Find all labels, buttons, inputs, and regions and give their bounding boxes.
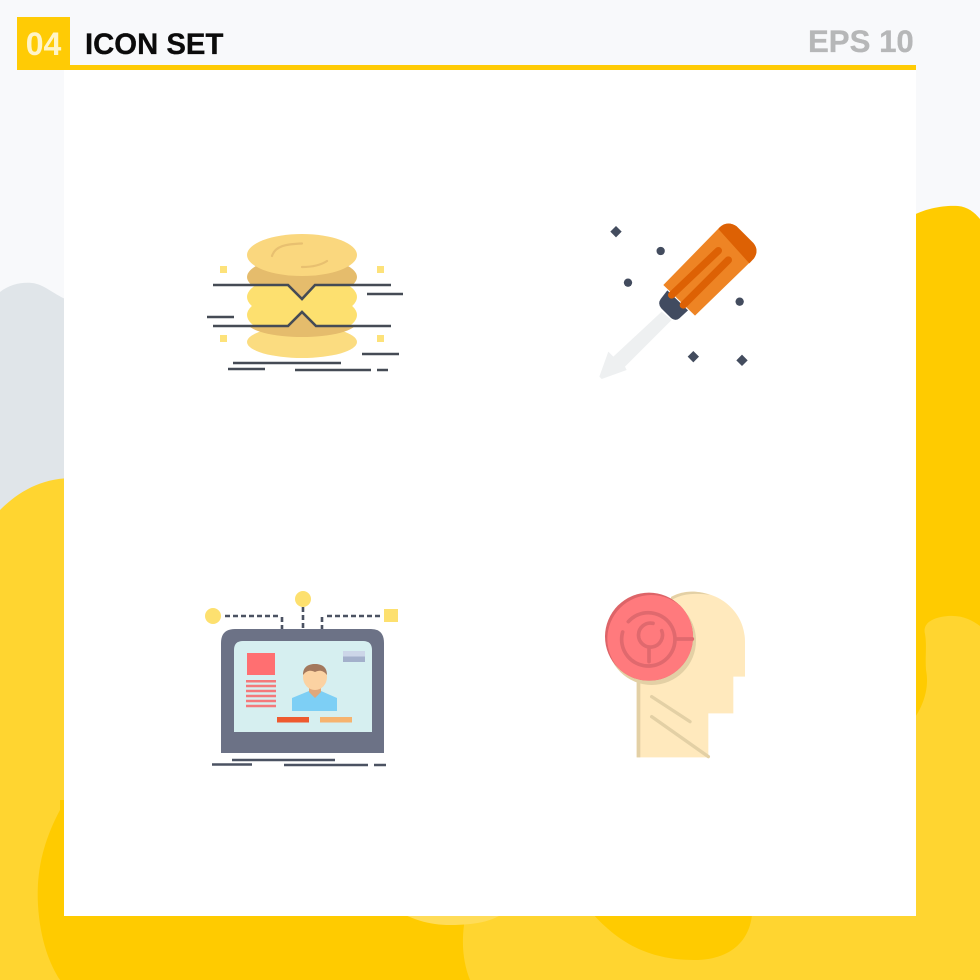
- format label: EPS 10: [808, 24, 914, 59]
- icon: screwdriver: [599, 223, 757, 379]
- icon: database stack: [207, 234, 403, 370]
- icon: laptop profile: [205, 591, 398, 765]
- sparkles: [610, 226, 748, 366]
- buttons: [277, 717, 352, 722]
- person: [292, 664, 337, 711]
- maze disc: [605, 593, 695, 683]
- collar: [659, 290, 688, 320]
- icon: head with maze: [605, 592, 745, 757]
- header rule: [17, 65, 916, 70]
- number badge: [17, 17, 70, 70]
- document: [246, 653, 276, 706]
- laptop body: [221, 629, 384, 753]
- base lines: [212, 760, 386, 765]
- blade: [599, 312, 672, 379]
- header: [17, 17, 916, 70]
- title: ICON SET: [85, 28, 223, 61]
- handle: [663, 224, 757, 316]
- head: [637, 592, 745, 757]
- panel: white icon card: [64, 70, 916, 916]
- small tabs: [343, 651, 365, 662]
- screen: [234, 641, 372, 732]
- connectors: [205, 591, 398, 629]
- number badge: 04: [26, 26, 62, 62]
